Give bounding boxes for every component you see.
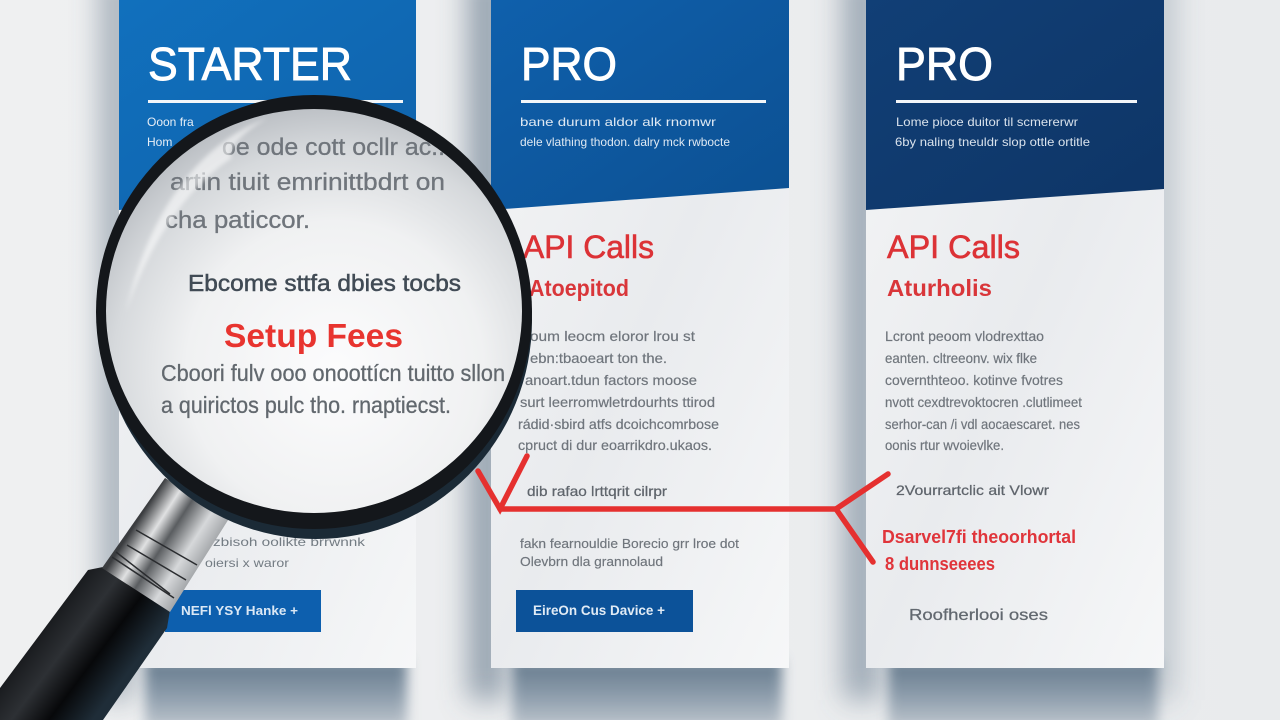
lens glass xyxy=(106,109,522,513)
panel: starter plan card xyxy=(119,0,416,668)
second pro body text: Lcront peoom vlodrexttao xyxy=(885,328,1044,344)
pro body text: rádid·sbird atfs dcoichcomrbose xyxy=(518,416,719,432)
starter description xyxy=(147,115,194,149)
magnified text: oe ode cott ocllr ac.. xyxy=(222,134,445,161)
second pro API calls heading: API Calls xyxy=(887,229,1020,265)
pro fine print: dib rafao lrttqrit cilrpr xyxy=(527,483,667,499)
pro body text: cpruct di dur eoarrikdro.ukaos. xyxy=(518,437,712,453)
pro body text: surt leerromwletrdourhts ttirod xyxy=(520,394,715,410)
magnified text: cha paticcor. xyxy=(165,207,310,234)
starter lower description xyxy=(205,535,366,570)
second pro body text: covernthteoo. kotinve fvotres xyxy=(885,372,1063,388)
pro header band xyxy=(491,0,789,210)
starter lower description: oiersi x waror xyxy=(205,556,289,570)
second pro body text: oonis rtur wvoievlke. xyxy=(885,437,1004,453)
pro title rule xyxy=(521,100,766,103)
pro API subheading: Atoepitod xyxy=(529,275,629,301)
starter description: Ooon fra xyxy=(147,115,194,129)
handle grip xyxy=(0,566,170,720)
second pro body text: nvott cexdtrevoktocren .clutlimeet xyxy=(885,394,1082,410)
second pro red warning text: Dsarvel7fi theoorhortal xyxy=(882,527,1076,547)
second pro body text xyxy=(885,328,1082,453)
second pro description: 6by naling tneuldr slop ottle ortitle xyxy=(895,135,1090,149)
second pro fine print: 2Vourrartclic ait Vlowr xyxy=(896,482,1049,498)
magnified body text: Cboori fulv ooo onoottícn tuitto sllon xyxy=(161,360,505,386)
pro body text xyxy=(518,328,719,453)
pro plan title: PRO xyxy=(521,38,617,90)
pro lower description: fakn fearnouldie Borecio grr lroe dot xyxy=(520,537,740,551)
starter title rule xyxy=(148,100,403,103)
pro description: dele vlathing thodon. dalry mck rwbocte xyxy=(520,135,730,149)
second pro footer note: Roofherlooi oses xyxy=(909,607,1048,624)
icon: magnifying glass xyxy=(0,95,532,720)
magnified setup fees label: Setup Fees xyxy=(224,317,403,354)
arrow: red connector between cards xyxy=(478,456,888,562)
second pro API subheading: Aturholis xyxy=(887,275,992,301)
pro description: bane durum aldor alk rnomwr xyxy=(520,115,716,129)
second pro red warning text: 8 dunnseeees xyxy=(885,554,995,574)
pro lower description: Olevbrn dla grannolaud xyxy=(520,555,663,569)
panel: first pro plan card xyxy=(491,0,789,668)
second pro header band xyxy=(866,0,1164,210)
pro lower description xyxy=(520,537,740,569)
second pro description: Lome pioce duitor til scmererwr xyxy=(896,115,1078,129)
magnified subheading: Ebcome sttfa dbies tocbs xyxy=(188,270,461,296)
pro API calls heading: API Calls xyxy=(523,229,654,265)
starter description: Hom xyxy=(147,135,172,149)
pro body text: ebn:tbaoeart ton the. xyxy=(530,350,667,366)
panel: second pro plan card xyxy=(866,0,1164,668)
second pro body text: serhor-can /i vdl aocaescaret. nes xyxy=(885,416,1080,432)
second pro red warning text xyxy=(882,527,1076,574)
pro call-to-action button xyxy=(516,590,693,632)
second pro description xyxy=(895,115,1090,149)
magnified body text: a quirictos pulc tho. rnaptiecst. xyxy=(161,392,451,418)
pro body text: anoart.tdun factors moose xyxy=(525,372,697,388)
lens rim xyxy=(96,95,532,539)
pro call-to-action button: EireOn Cus Davice + xyxy=(533,602,665,618)
starter plan title: STARTER xyxy=(148,38,352,90)
starter header band xyxy=(119,0,416,210)
metal ferrule xyxy=(102,478,230,612)
magnified text xyxy=(165,134,445,234)
second pro title rule xyxy=(896,100,1137,103)
second pro plan title: PRO xyxy=(896,38,993,90)
pro body text: oum leocm eloror lrou st xyxy=(530,328,695,344)
magnified body text xyxy=(161,360,505,418)
starter lower description: zbisoh oolikte brrwnnk xyxy=(213,535,366,549)
second pro body text: eanten. cltreeonv. wix flke xyxy=(885,350,1037,366)
magnified text: artin tiuit emrinittbdrt on xyxy=(170,169,445,196)
lens glare xyxy=(126,118,268,312)
starter call-to-action button: NEFl YSY Hanke + xyxy=(181,603,298,618)
starter call-to-action button xyxy=(165,590,321,632)
pro description xyxy=(520,115,730,149)
